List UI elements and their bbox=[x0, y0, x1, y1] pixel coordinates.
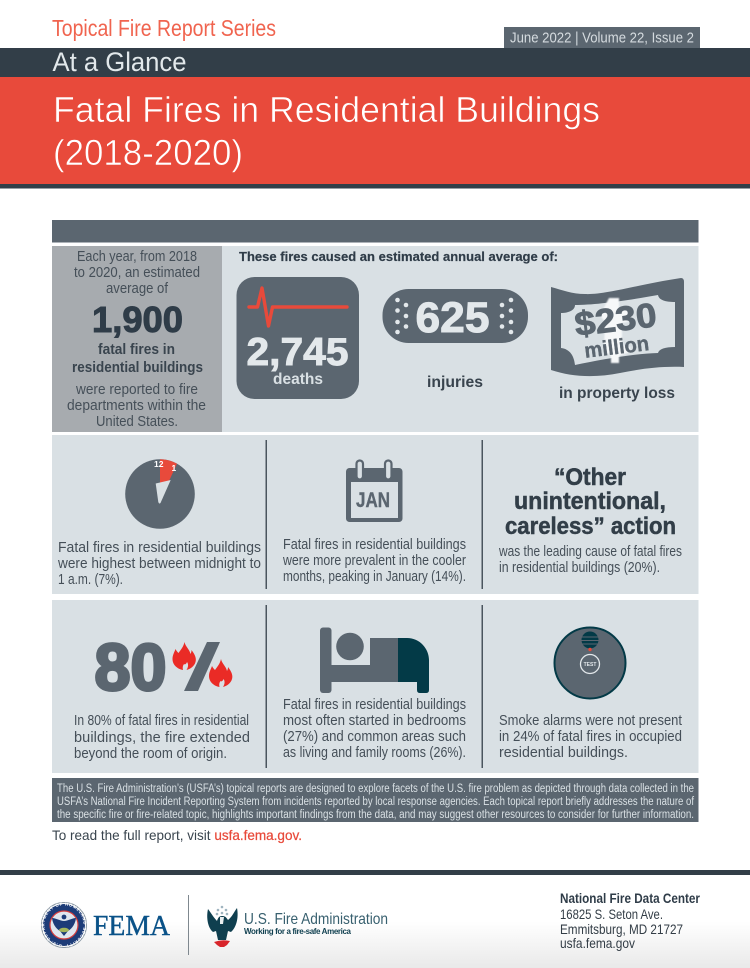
header: At a Glance band bbox=[0, 47, 750, 77]
header: red title banner: Fatal Fires in Residential Buildings bbox=[53, 89, 600, 130]
text: smoke alarms bbox=[499, 713, 682, 761]
text: time of day: Fatal fires in residential buildings bbox=[58, 540, 261, 556]
panel: when and why bbox=[52, 435, 698, 594]
text: smoke alarms: in 24% of fatal fires in occupied bbox=[499, 729, 682, 745]
text: smoke alarms: residential buildings. bbox=[499, 745, 628, 761]
logo: USFA wordmark: Working for a fire-safe America bbox=[244, 927, 352, 936]
text: season: months, peaking in January (14%). bbox=[283, 569, 466, 585]
stat: deaths bbox=[236, 277, 359, 399]
link line: full report: To read the full report, visit usfa.fema.gov. bbox=[52, 827, 302, 843]
text: area of origin: most often started in bedrooms bbox=[283, 713, 466, 729]
panel: annual fires summary: were reported to fire bbox=[75, 382, 198, 398]
label: property loss: in property loss bbox=[559, 385, 675, 402]
panel: spread, origin and alarms bbox=[52, 600, 698, 773]
icon: January calendar bbox=[346, 460, 402, 522]
stat: 1,900 fires: 1,900 bbox=[92, 299, 183, 340]
icon: smoke alarm: TEST bbox=[584, 662, 596, 668]
heading: leading cause: unintentional, bbox=[514, 488, 666, 515]
panel: annual fires summary: Each year, from 2018 bbox=[77, 249, 197, 265]
logo: FEMA wordmark: FEMA bbox=[93, 911, 171, 942]
stat: 80 percent with flames bbox=[94, 630, 232, 704]
logo: USFA eagle bbox=[207, 906, 238, 947]
footer address block: usfa.fema.gov bbox=[560, 935, 635, 951]
stat: property loss banknote bbox=[551, 278, 684, 376]
panel: annual losses bbox=[222, 246, 698, 432]
icon: bed bbox=[320, 628, 429, 693]
stat: deaths: deaths bbox=[273, 371, 323, 388]
text: area of origin: as living and family rooms (26%). bbox=[283, 745, 466, 761]
text: extended beyond room: buildings, the fire extended bbox=[74, 730, 250, 746]
text: leading cause bbox=[498, 544, 682, 576]
info bar: about the reports bbox=[52, 778, 698, 822]
text: season: were more prevalent in the cooler bbox=[282, 553, 466, 569]
heading: leading cause: careless” action bbox=[505, 513, 676, 540]
text: time of day: 1 a.m. (7%). bbox=[58, 572, 123, 588]
footer address block: 16825 S. Seton Ave. bbox=[560, 906, 663, 922]
text: season: Fatal fires in residential buildings bbox=[283, 537, 466, 553]
icon: clock: 1 bbox=[172, 463, 176, 473]
icon: clock bbox=[125, 459, 195, 529]
stat: property loss banknote: $230 bbox=[573, 296, 659, 344]
heading: leading cause: “Other bbox=[554, 464, 626, 491]
text: season bbox=[282, 537, 466, 585]
text: leading cause: was the leading cause of fatal fires bbox=[498, 544, 682, 560]
footer address block: Emmitsburg, MD 21727 bbox=[560, 921, 683, 937]
text: area of origin bbox=[283, 697, 466, 761]
panel: annual fires summary: United States. bbox=[96, 414, 178, 430]
stat: injuries bandage bbox=[382, 289, 528, 343]
logo: USFA wordmark bbox=[244, 911, 388, 936]
section header band bbox=[52, 220, 698, 242]
panel: annual fires summary: residential buildings bbox=[72, 359, 203, 376]
panel: annual fires summary: to 2020, an estimated bbox=[74, 265, 200, 281]
heading: leading cause bbox=[505, 464, 676, 540]
header: series title: Topical Fire Report Series bbox=[52, 15, 276, 41]
text: time of day: were highest between midnight to bbox=[57, 556, 261, 572]
heading: annual average: These fires caused an estimated annual average of: bbox=[239, 249, 558, 264]
header: issue date tag: June 2022 | Volume 22, Issue 2 bbox=[510, 30, 694, 46]
panel: annual fires summary bbox=[52, 246, 222, 432]
panel: annual fires summary: average of bbox=[106, 281, 169, 297]
stat: property loss banknote: million bbox=[583, 332, 650, 363]
stat: injuries bandage: 625 bbox=[416, 294, 490, 342]
icon: clock: 12 bbox=[154, 459, 164, 469]
text: area of origin: Fatal fires in residential buildings bbox=[283, 697, 466, 713]
panel: annual fires summary: fatal fires in bbox=[98, 341, 175, 358]
panel: annual fires summary: departments within the bbox=[67, 398, 206, 414]
text: extended beyond room: beyond the room of origin. bbox=[74, 746, 227, 762]
text: area of origin: (27%) and common areas such bbox=[283, 729, 466, 745]
header: At a Glance band: At a Glance bbox=[52, 47, 186, 77]
icon: smoke alarm bbox=[554, 628, 626, 698]
icon: January calendar: JAN bbox=[356, 489, 390, 512]
footer address block bbox=[560, 891, 701, 951]
footer address block: National Fire Data Center bbox=[560, 891, 701, 906]
text: extended beyond room: In 80% of fatal fires in residential bbox=[74, 713, 249, 729]
logo: USFA wordmark: U.S. Fire Administration bbox=[244, 911, 388, 928]
footer background bbox=[0, 870, 750, 968]
header: red title banner: (2018-2020) bbox=[53, 132, 243, 173]
logo: DHS seal: U.S. DEPARTMENT OF HOMELAND SECURITY bbox=[42, 902, 86, 948]
stat: 80 percent with flames: 80 bbox=[94, 630, 166, 704]
text: leading cause: in residential buildings (20%). bbox=[499, 560, 660, 576]
header: red title banner bbox=[0, 77, 750, 188]
label: injuries: injuries bbox=[427, 374, 483, 391]
footer divider bbox=[188, 895, 189, 955]
text: time of day bbox=[57, 540, 261, 588]
text: smoke alarms: Smoke alarms were not present bbox=[499, 713, 682, 729]
text: extended beyond room bbox=[74, 713, 250, 762]
stat: deaths: 2,745 bbox=[246, 331, 348, 374]
